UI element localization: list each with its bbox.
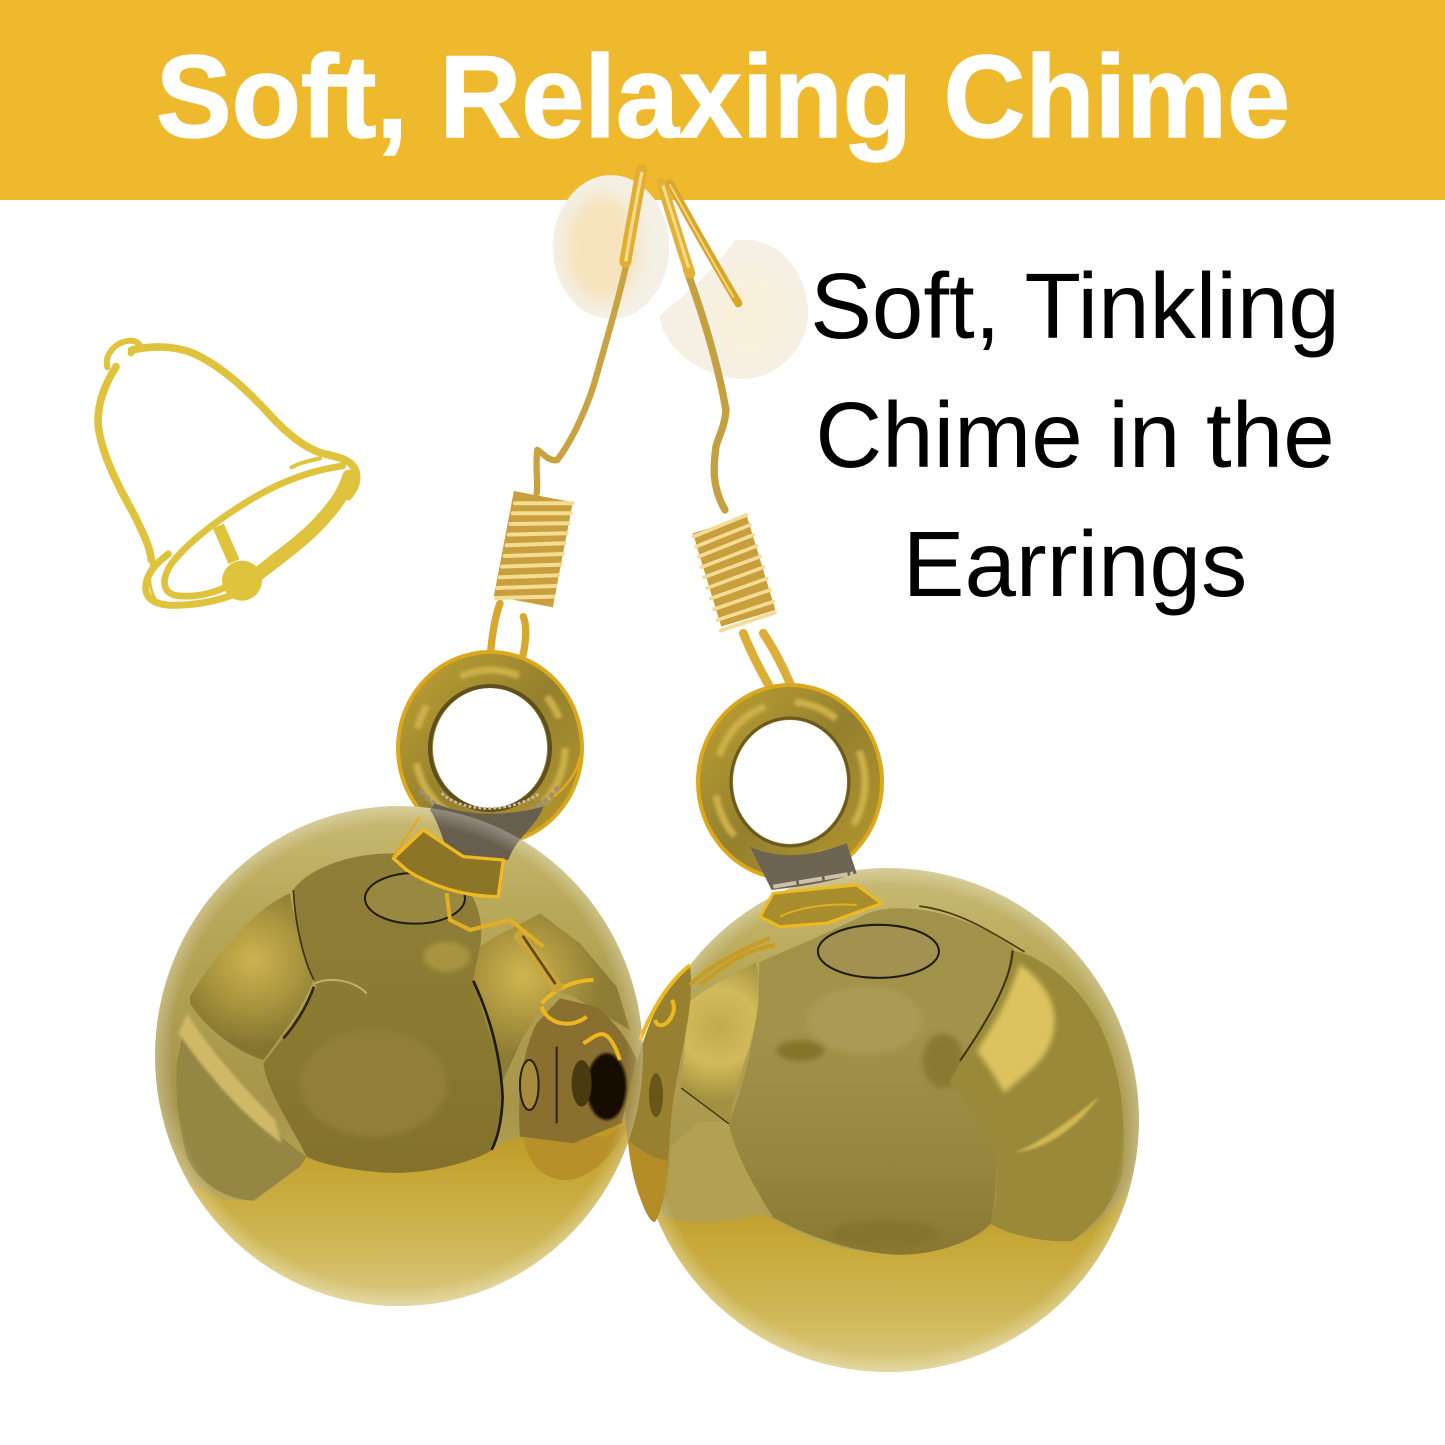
icon: bell outline — [98, 341, 357, 605]
rim sheen on the balls — [637, 868, 1139, 1372]
hook wire — [662, 183, 797, 700]
body text: Soft, Tinkling — [810, 254, 1340, 358]
jump ring — [398, 652, 582, 844]
silicone earring backs — [553, 175, 808, 379]
jump ring — [698, 685, 882, 879]
wire coil — [496, 497, 573, 602]
body text — [810, 254, 1340, 616]
wire coil — [693, 515, 775, 631]
header banner — [0, 0, 1445, 200]
right earring — [620, 183, 1164, 1394]
left earring — [140, 170, 673, 1323]
ball — [637, 868, 1139, 1372]
body text: Chime in the — [815, 383, 1335, 487]
ball clasp — [519, 937, 637, 1143]
left ball rim sheen — [155, 806, 643, 1306]
ball — [155, 806, 643, 1306]
hook wire — [490, 170, 642, 670]
title: Soft, Relaxing Chime — [156, 31, 1290, 162]
ring base and filigree — [750, 843, 882, 927]
body text: Earrings — [903, 512, 1247, 616]
ball clasp — [625, 938, 775, 1222]
ring base and filigree — [393, 757, 580, 947]
